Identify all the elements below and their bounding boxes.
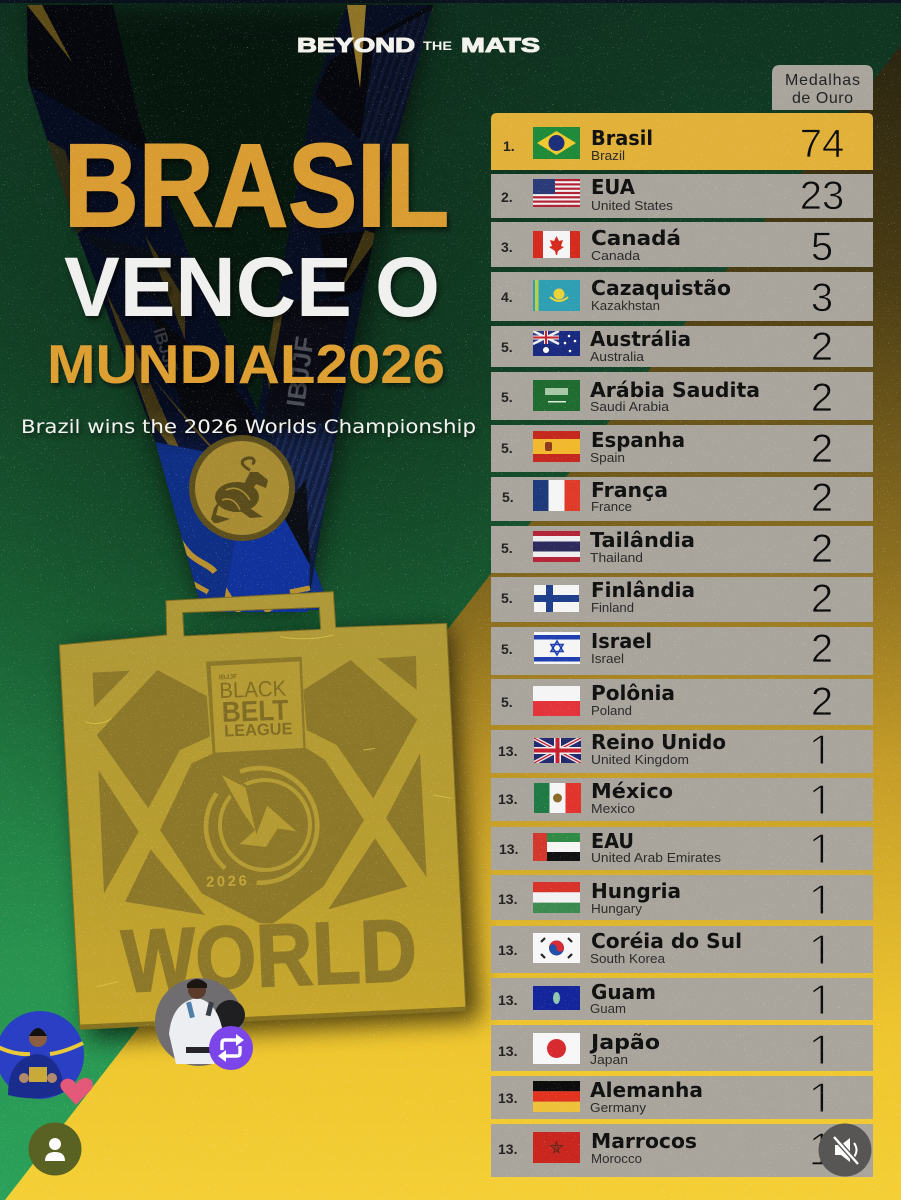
row: México <box>491 775 873 827</box>
row: Reino Unido: United Kingdom <box>591 753 689 767</box>
flag: South Korea <box>533 933 580 963</box>
medal word WORLD: WORLD <box>120 900 418 1011</box>
row: França <box>491 476 873 521</box>
row: México: 13. <box>498 791 517 807</box>
row: Coréia do Sul: 1 <box>808 925 834 977</box>
title line: BRASIL: BRASIL <box>64 120 449 252</box>
row: Hungria: 13. <box>498 891 517 907</box>
row: Japão: 1 <box>808 1025 834 1077</box>
medal body <box>59 592 466 1029</box>
row: Tailândia <box>491 526 873 573</box>
row: Austrália: 5. <box>501 339 513 355</box>
row: Guam: Guam <box>591 980 656 1004</box>
flag: Germany <box>533 1081 580 1112</box>
ribbon IBJJF lettering: IBJJF <box>280 335 320 409</box>
row: França: 2 <box>811 476 833 520</box>
row: Guam <box>491 975 873 1027</box>
left ribbon strap <box>27 5 324 610</box>
row: Finlândia: 5. <box>501 590 513 606</box>
row: Arábia Saudita: Saudi Arabia <box>590 400 669 414</box>
title <box>47 120 449 395</box>
row: Israel: 2 <box>811 627 833 671</box>
flag: Poland <box>533 686 580 716</box>
ribbon medallion with lion <box>189 435 295 541</box>
row: Austrália <box>491 325 873 369</box>
row: Austrália: Austrália <box>590 327 691 351</box>
row: Arábia Saudita: 5. <box>501 389 513 405</box>
row: Hungria: Hungria <box>591 879 681 903</box>
flag: France <box>533 480 580 511</box>
flag: Brazil <box>533 127 580 159</box>
row: Finlândia: Finlândia <box>591 578 695 602</box>
row: Japão: Japão <box>589 1030 660 1054</box>
row: EAU <box>491 824 873 876</box>
flag: Spain <box>533 431 580 462</box>
row: EUA: United States <box>591 199 673 213</box>
row: Alemanha: 1 <box>808 1073 834 1125</box>
row: Marrocos <box>491 1123 873 1177</box>
icon: lion <box>211 458 268 523</box>
row: Cazaquistão: 4. <box>501 289 513 305</box>
row: Coréia do Sul: 13. <box>498 942 517 958</box>
medal ribbon <box>27 3 434 622</box>
row: Coréia do Sul: Coréia do Sul <box>591 929 742 953</box>
flag: Israel <box>534 632 580 664</box>
flag: Kazakhstan <box>533 280 580 311</box>
flag: Australia <box>533 331 580 356</box>
flag: Morocco <box>533 1132 580 1163</box>
logo: BEYOND <box>297 35 415 57</box>
medal scratches <box>47 635 452 987</box>
row: Japão <box>491 1025 873 1077</box>
row: Hungria: Hungary <box>591 902 643 916</box>
row: França: França <box>591 478 668 502</box>
row: Finlândia <box>491 577 873 622</box>
row: Alemanha <box>491 1073 873 1125</box>
row: Tailândia: Thailand <box>590 551 643 565</box>
row: Israel: Israel <box>591 629 652 653</box>
row: Espanha: Espanha <box>591 428 685 452</box>
row: Canadá: 5 <box>811 225 833 269</box>
flag: Canada <box>533 231 580 258</box>
row: Espanha: 5. <box>501 440 513 456</box>
avatar: athlete in blue <box>0 1011 84 1099</box>
row: Polônia: 5. <box>501 694 513 710</box>
column header: gold medals: Medalhas <box>785 72 860 89</box>
row: Coréia do Sul <box>491 925 873 977</box>
button: profile <box>28 1122 82 1176</box>
row: Espanha: Spain <box>590 451 625 465</box>
row: Guam: 1 <box>808 975 834 1027</box>
emblem year: 2026 <box>206 873 247 891</box>
logo: MATS <box>461 35 540 57</box>
row: Coréia do Sul: South Korea <box>590 952 665 966</box>
avatar: athlete in white gi <box>155 978 245 1066</box>
medal table <box>491 113 873 1177</box>
column header: gold medals <box>772 65 873 110</box>
recessed shapes <box>93 656 427 923</box>
row: Arábia Saudita: 2 <box>811 376 833 420</box>
league badge: LEAGUE <box>224 719 293 740</box>
row: EAU: United Arab Emirates <box>591 851 721 865</box>
row: Alemanha: Germany <box>590 1101 647 1115</box>
row: Brasil: Brasil <box>591 126 653 150</box>
row: Espanha: 2 <box>811 427 833 471</box>
row: Austrália: 2 <box>811 325 833 369</box>
row: Arábia Saudita <box>491 372 873 420</box>
row: Tailândia: 5. <box>501 540 513 556</box>
row: Marrocos: Morocco <box>591 1152 642 1166</box>
row: EUA: 2. <box>501 189 513 205</box>
league badge: BELT <box>221 695 289 729</box>
row: Cazaquistão: Cazaquistão <box>591 276 731 300</box>
row: França: 5. <box>502 489 514 505</box>
row: Arábia Saudita: Arábia Saudita <box>590 378 760 402</box>
flag: United Kingdom <box>534 738 581 763</box>
flag: Thailand <box>533 531 580 562</box>
league badge: BLACK <box>219 676 287 703</box>
row: Tailândia: 2 <box>811 527 833 571</box>
row: EUA: EUA <box>591 175 636 199</box>
row: México: México <box>591 779 673 803</box>
row: EUA <box>491 174 873 218</box>
row: Reino Unido <box>491 725 873 777</box>
logo <box>297 35 540 57</box>
row: Reino Unido: 13. <box>498 743 517 759</box>
row: Guam: 13. <box>498 992 517 1008</box>
row: Finlândia: Finland <box>591 601 634 615</box>
row: Canadá: Canadá <box>591 226 681 250</box>
row: Tailândia: Tailândia <box>590 528 695 552</box>
row: Cazaquistão <box>491 272 873 321</box>
row: Japão: 13. <box>498 1043 517 1059</box>
row: Marrocos: 13. <box>498 1141 517 1157</box>
row: EAU: EAU <box>591 829 634 853</box>
row: México: 1 <box>808 775 834 827</box>
title line: VENCE O: VENCE O <box>64 240 440 334</box>
row: Espanha <box>491 425 873 472</box>
flag: USA <box>533 179 580 207</box>
row: Austrália: Australia <box>590 350 644 364</box>
row: Polônia: 2 <box>811 680 833 724</box>
row: Canadá: Canada <box>591 249 640 263</box>
row: Cazaquistão: 3 <box>811 276 833 320</box>
right ribbon strap <box>222 5 433 612</box>
row: Polônia: Polônia <box>591 681 675 705</box>
title line: MUNDIAL 2026: MUNDIAL2026 <box>47 333 445 395</box>
row: Brasil: 1. <box>503 138 515 154</box>
logo: THE <box>423 39 452 53</box>
row: EUA: 23 <box>800 174 844 218</box>
row: Israel <box>491 627 873 675</box>
row: Reino Unido: Reino Unido <box>591 730 726 754</box>
button: mute <box>818 1124 872 1176</box>
flag: United Arab Emirates <box>533 833 580 861</box>
flag: Mexico <box>534 783 581 813</box>
row: Hungria <box>491 875 873 927</box>
column header: gold medals: de Ouro <box>792 90 853 107</box>
flag: Finland <box>534 585 579 612</box>
row: Canadá <box>491 222 873 269</box>
row: Guam: Guam <box>590 1002 626 1016</box>
world champion emblem <box>206 768 317 883</box>
flag: Hungary <box>533 882 580 913</box>
row: Cazaquistão: Kazakhstan <box>591 299 660 313</box>
row: Israel: 5. <box>501 641 513 657</box>
row: Japão: Japan <box>590 1053 628 1067</box>
row: Brasil: Brazil <box>591 149 625 163</box>
medal plate <box>47 592 466 1029</box>
row: Finlândia: 2 <box>811 577 833 621</box>
row: Polônia: Poland <box>591 704 632 718</box>
row: Canadá: 3. <box>501 239 513 255</box>
row: França: France <box>591 500 632 514</box>
row: Polônia <box>491 679 873 725</box>
row: Israel: Israel <box>591 652 624 666</box>
league badge: IBJJF <box>219 674 237 681</box>
flag: Saudi Arabia <box>533 380 580 411</box>
row: EAU: 1 <box>808 824 834 876</box>
row: Reino Unido: 1 <box>808 725 834 777</box>
row: Marrocos: Marrocos <box>591 1129 697 1153</box>
row: Brasil <box>491 113 873 170</box>
icon: heart reaction <box>60 1078 93 1105</box>
medal drop shadow <box>70 628 480 1040</box>
row: Brasil: 74 <box>800 122 844 166</box>
row: EAU: 13. <box>499 841 518 857</box>
ribbon IBJJF lettering left: IBJJF <box>149 325 182 375</box>
flag: Guam <box>533 986 580 1010</box>
subtitle: Brazil wins the 2026 Worlds Championship <box>21 416 476 438</box>
row: México: Mexico <box>591 802 635 816</box>
row: Marrocos: 1 <box>808 1123 834 1175</box>
flag: Japan <box>533 1033 580 1064</box>
league badge <box>211 661 303 753</box>
row: Hungria: 1 <box>808 875 834 927</box>
row: Alemanha: 13. <box>498 1090 517 1106</box>
row: Alemanha: Alemanha <box>590 1078 703 1102</box>
icon: purple repost badge <box>209 1026 253 1070</box>
